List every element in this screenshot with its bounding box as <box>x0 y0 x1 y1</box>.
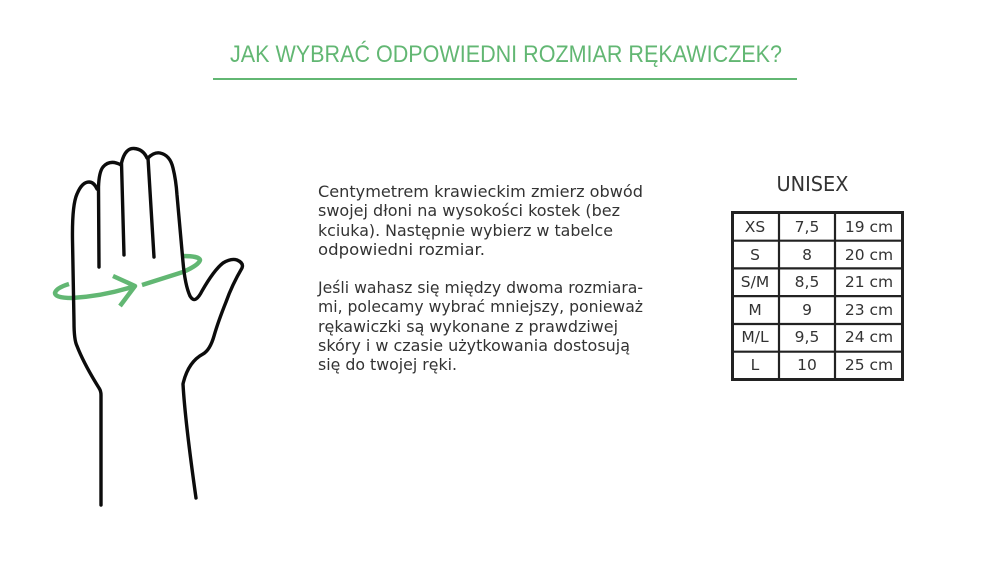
row M/L: 9,5 <box>795 328 819 346</box>
measuring tape arrow <box>55 256 200 306</box>
row M/L: M/L <box>741 328 769 346</box>
row S/M: 21 cm <box>845 273 893 291</box>
row S/M: S/M <box>741 273 769 291</box>
row M: M <box>748 301 762 319</box>
row M <box>748 301 893 319</box>
row S/M: 8,5 <box>795 273 819 291</box>
row L <box>751 356 893 374</box>
row L: 25 cm <box>845 356 893 374</box>
text block: size advice: się do twojej ręki. <box>318 355 457 374</box>
row M/L: 24 cm <box>845 328 893 346</box>
row S: S <box>750 246 760 264</box>
text block: measuring instructions: odpowiedni rozmiar. <box>318 240 485 259</box>
text block: size advice: rękawiczki są wykonane z prawdziwej <box>318 317 618 336</box>
text block: measuring instructions: kciuka). Następnie wybierz w tabelce <box>318 221 613 240</box>
row XS: XS <box>745 218 765 236</box>
text block: size advice: skóry i w czasie użytkowania dostosują <box>318 336 630 355</box>
row S/M <box>741 273 893 291</box>
title: JAK WYBRAĆ ODPOWIEDNI ROZMIAR RĘKAWICZEK? <box>230 41 782 68</box>
row XS <box>745 218 893 236</box>
row S: 20 cm <box>845 246 893 264</box>
heading: unisex: UNISEX <box>776 172 849 196</box>
icon: hand with measuring tape <box>55 148 242 505</box>
row L: 10 <box>797 356 817 374</box>
row S: 8 <box>802 246 812 264</box>
row S <box>750 246 893 264</box>
size table <box>732 212 903 380</box>
row XS: 19 cm <box>845 218 893 236</box>
text block: size advice: Jeśli wahasz się między dwoma rozmiara- <box>317 278 643 297</box>
hand outline <box>72 148 242 505</box>
row XS: 7,5 <box>795 218 819 236</box>
row L: L <box>751 356 760 374</box>
row M: 23 cm <box>845 301 893 319</box>
text block: measuring instructions <box>318 182 643 259</box>
row M: 9 <box>802 301 812 319</box>
text block: measuring instructions: swojej dłoni na wysokości kostek (bez <box>318 201 620 220</box>
text block: size advice: mi, polecamy wybrać mniejszy, ponieważ <box>318 297 643 316</box>
row M/L <box>741 328 893 346</box>
text block: measuring instructions: Centymetrem krawieckim zmierz obwód <box>318 182 643 201</box>
text block: size advice <box>317 278 643 374</box>
